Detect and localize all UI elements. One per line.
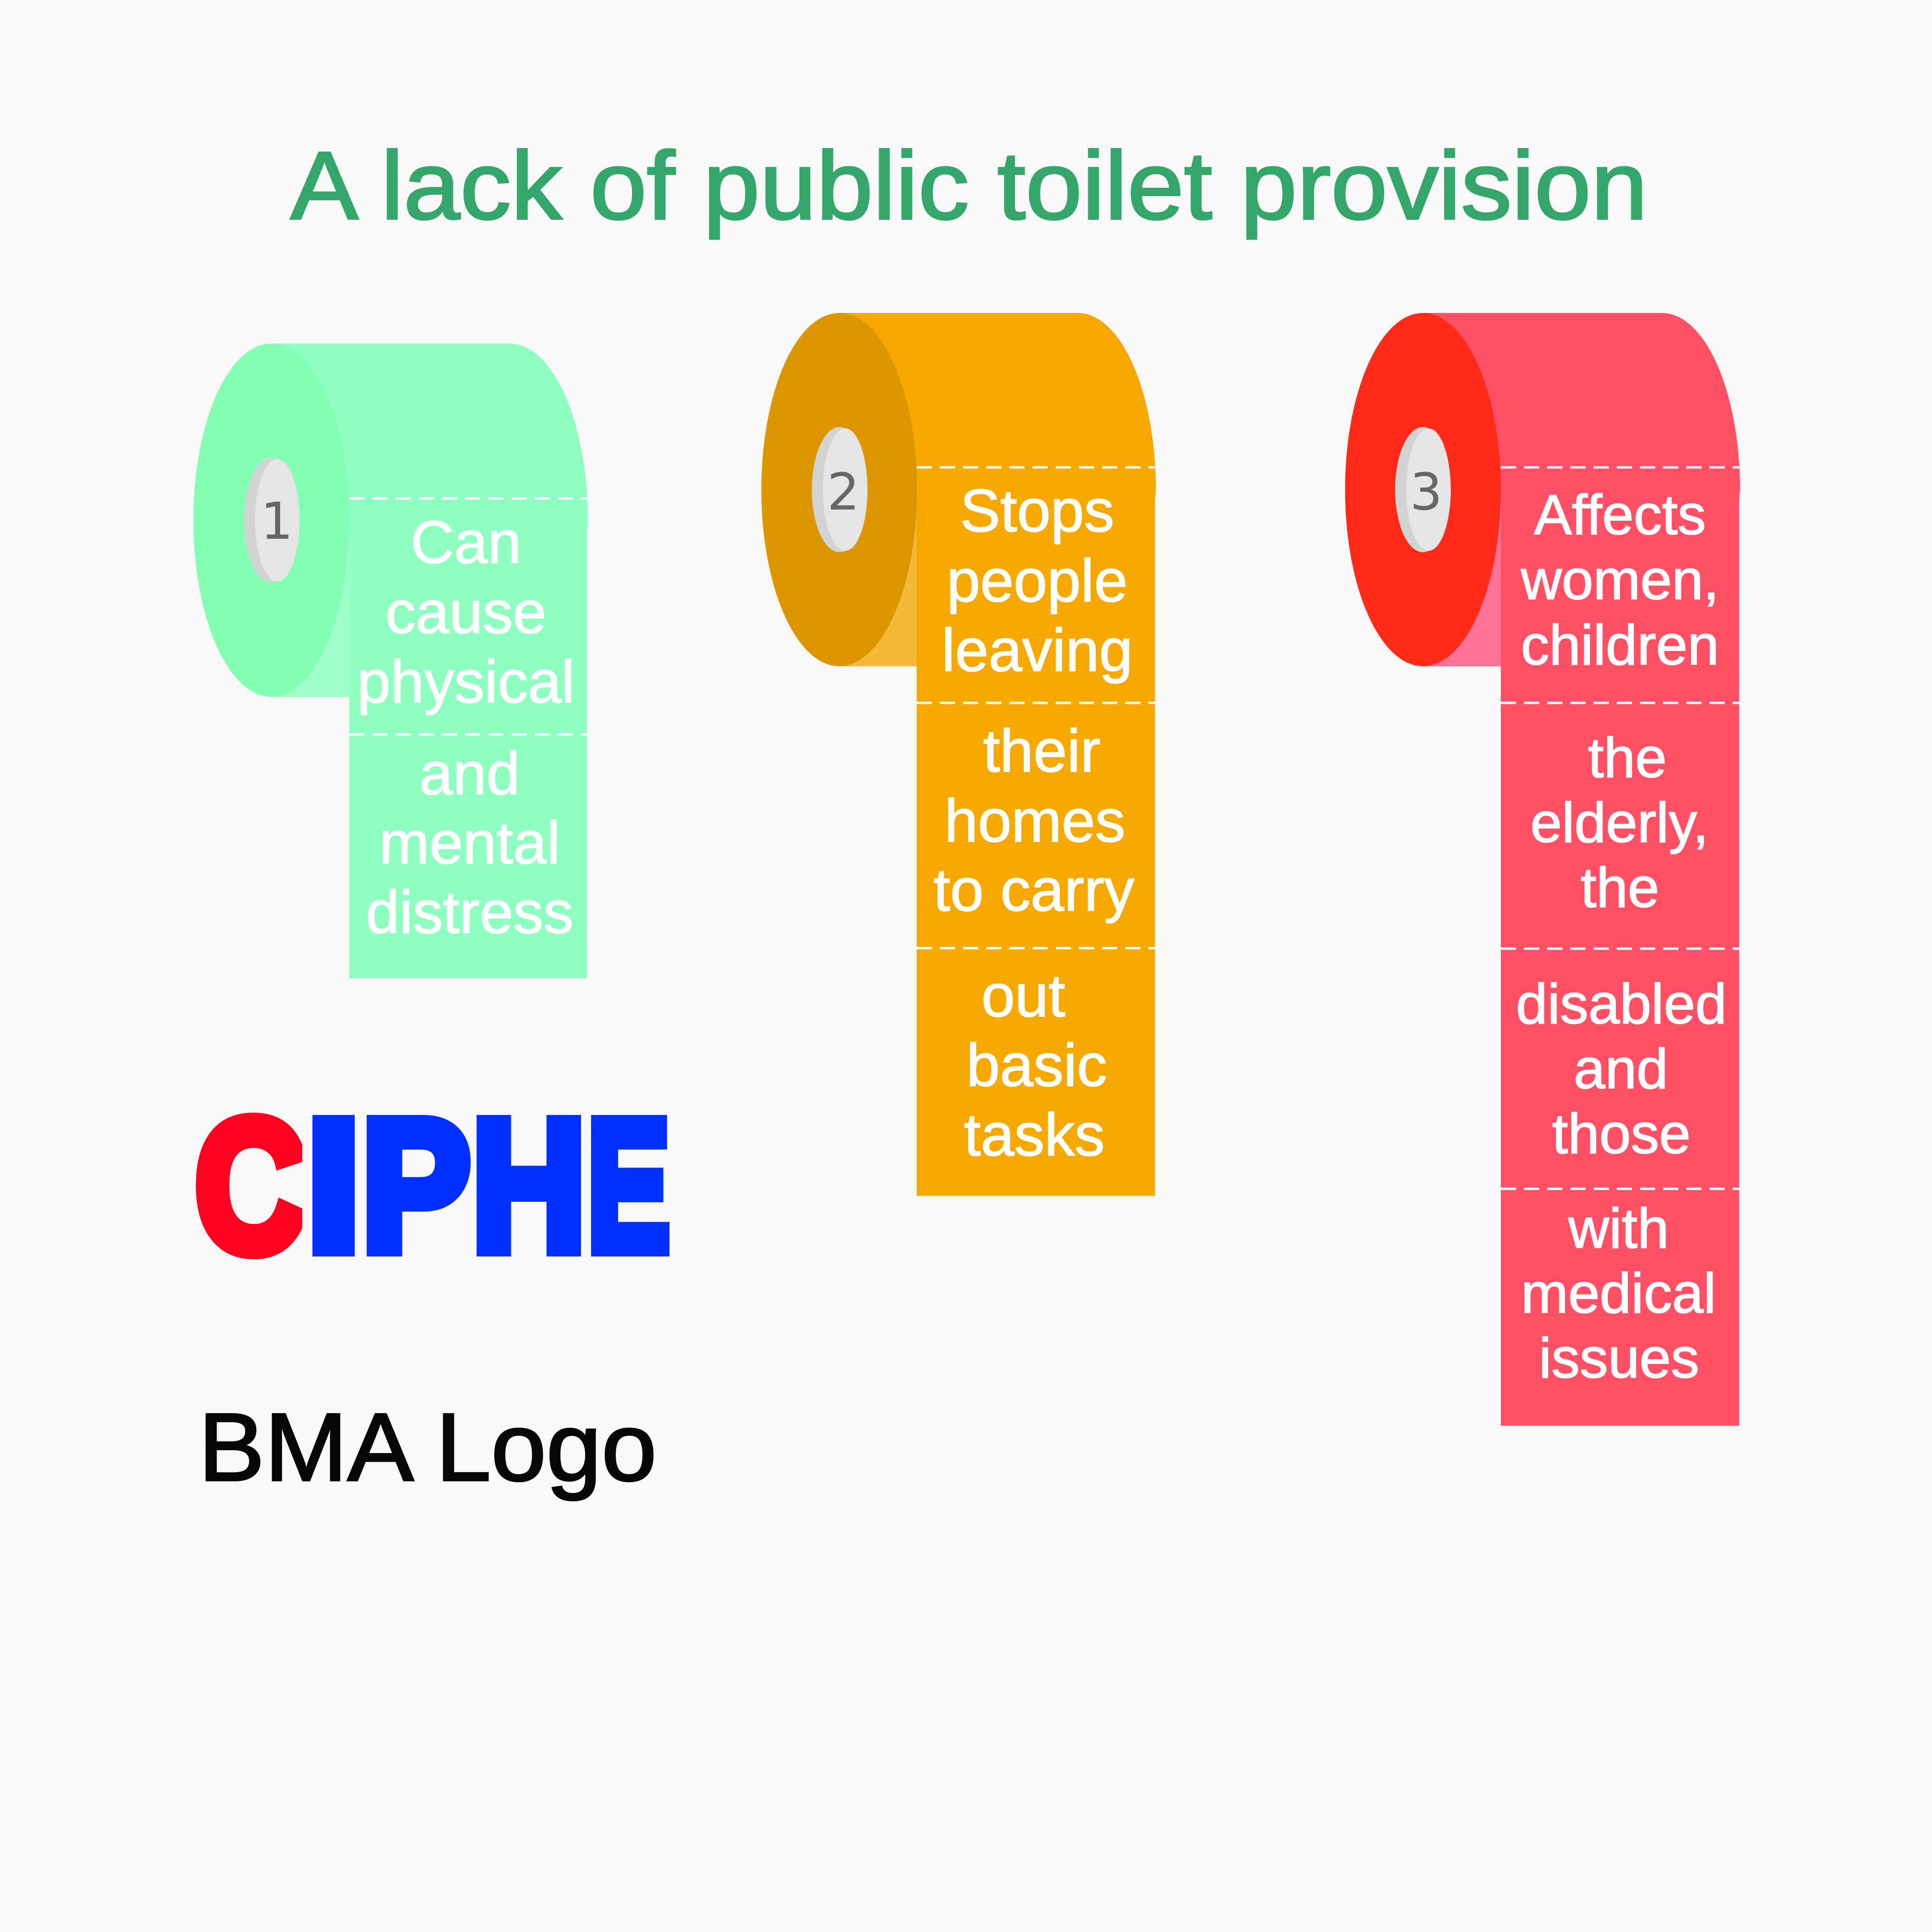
roll 3 text: disabled and those: and bbox=[1574, 1037, 1668, 1100]
roll 1 text: Can cause physical bbox=[357, 508, 575, 715]
roll 1 paper body bbox=[271, 344, 588, 978]
CIPHE logo: C bbox=[195, 1081, 305, 1290]
roll 2 text: Stops people leaving: people bbox=[947, 547, 1128, 614]
CIPHE logo: P bbox=[362, 1082, 470, 1289]
roll 1 text: Can cause physical: Can bbox=[411, 508, 521, 576]
roll 2 text: out basic tasks bbox=[964, 962, 1107, 1168]
roll 1 number: 1 bbox=[261, 491, 293, 551]
roll 3 core bbox=[1395, 427, 1451, 552]
roll 3 number: 3 bbox=[1410, 462, 1442, 522]
roll 3 text: the elderly, the: elderly, bbox=[1530, 791, 1709, 854]
CIPHE logo bbox=[196, 1113, 670, 1259]
roll 3 text: the elderly, the: the bbox=[1588, 726, 1667, 789]
roll 3 paper body bbox=[1423, 313, 1740, 1426]
roll 2 underside shade bbox=[839, 490, 917, 666]
roll 3 underside shade bbox=[1423, 490, 1501, 666]
roll 3 text: Affects women, children: women, bbox=[1520, 548, 1719, 611]
roll 2 text: their homes to carry: their bbox=[983, 717, 1100, 784]
roll 2 text: their homes to carry: homes bbox=[944, 787, 1125, 854]
roll 3 text: with medical issues: issues bbox=[1539, 1326, 1699, 1390]
roll 2 text: out basic tasks: tasks bbox=[964, 1101, 1105, 1168]
roll 2 number: 2 bbox=[827, 462, 860, 522]
CIPHE logo: E bbox=[587, 1082, 670, 1289]
roll 3 text: the elderly, the: the bbox=[1581, 856, 1659, 919]
panel: roll 1 physical and mental distress bbox=[193, 344, 588, 978]
panel: roll 2 stops people leaving homes bbox=[761, 313, 1156, 1196]
CIPHE logo: I bbox=[307, 1082, 360, 1289]
roll 3 text: disabled and those bbox=[1516, 972, 1727, 1165]
roll 1 text: Can cause physical: cause bbox=[386, 578, 546, 646]
roll 2 paper body bbox=[839, 313, 1156, 1196]
roll 1 text: and mental distress: and bbox=[420, 740, 520, 807]
title: A lack of public toilet provision bbox=[290, 132, 1648, 240]
roll 3 text: the elderly, the bbox=[1530, 726, 1709, 919]
panel: roll 3 affects vulnerable groups bbox=[1345, 313, 1740, 1426]
roll 3 text: Affects women, children: Affects bbox=[1534, 483, 1706, 546]
roll 2 text: Stops people leaving: Stops bbox=[960, 477, 1114, 544]
roll 3 text: disabled and those: disabled bbox=[1516, 972, 1727, 1035]
roll 2 text: their homes to carry bbox=[933, 717, 1135, 924]
roll 3 text: Affects women, children bbox=[1520, 483, 1719, 676]
roll 1 underside shade bbox=[271, 520, 349, 697]
roll 2 core bbox=[812, 427, 867, 552]
roll 2 text: their homes to carry: to carry bbox=[933, 856, 1135, 924]
CIPHE logo: H bbox=[472, 1082, 586, 1289]
roll 3 text: with medical issues: medical bbox=[1521, 1262, 1716, 1325]
roll 1 text: and mental distress: distress bbox=[366, 878, 574, 946]
roll 2 text: Stops people leaving: leaving bbox=[942, 616, 1133, 684]
roll 3 text: Affects women, children: children bbox=[1521, 613, 1719, 676]
roll 1 text: and mental distress bbox=[366, 740, 574, 946]
roll 2 text: out basic tasks: out bbox=[982, 962, 1065, 1029]
BMA logo placeholder text: BMA Logo bbox=[198, 1393, 657, 1501]
roll 3 text: disabled and those: those bbox=[1552, 1102, 1690, 1165]
roll 3 text: with medical issues: with bbox=[1568, 1197, 1669, 1260]
roll 1 end face bbox=[193, 344, 349, 697]
roll 3 end face bbox=[1345, 313, 1501, 666]
roll 1 text: and mental distress: mental bbox=[379, 809, 560, 876]
roll 3 text: with medical issues bbox=[1521, 1197, 1716, 1390]
roll 1 text: Can cause physical: physical bbox=[357, 648, 575, 715]
roll 2 end face bbox=[761, 313, 917, 666]
roll 2 text: out basic tasks: basic bbox=[966, 1031, 1107, 1099]
roll 1 core bbox=[244, 458, 300, 583]
roll 2 text: Stops people leaving bbox=[942, 477, 1133, 684]
